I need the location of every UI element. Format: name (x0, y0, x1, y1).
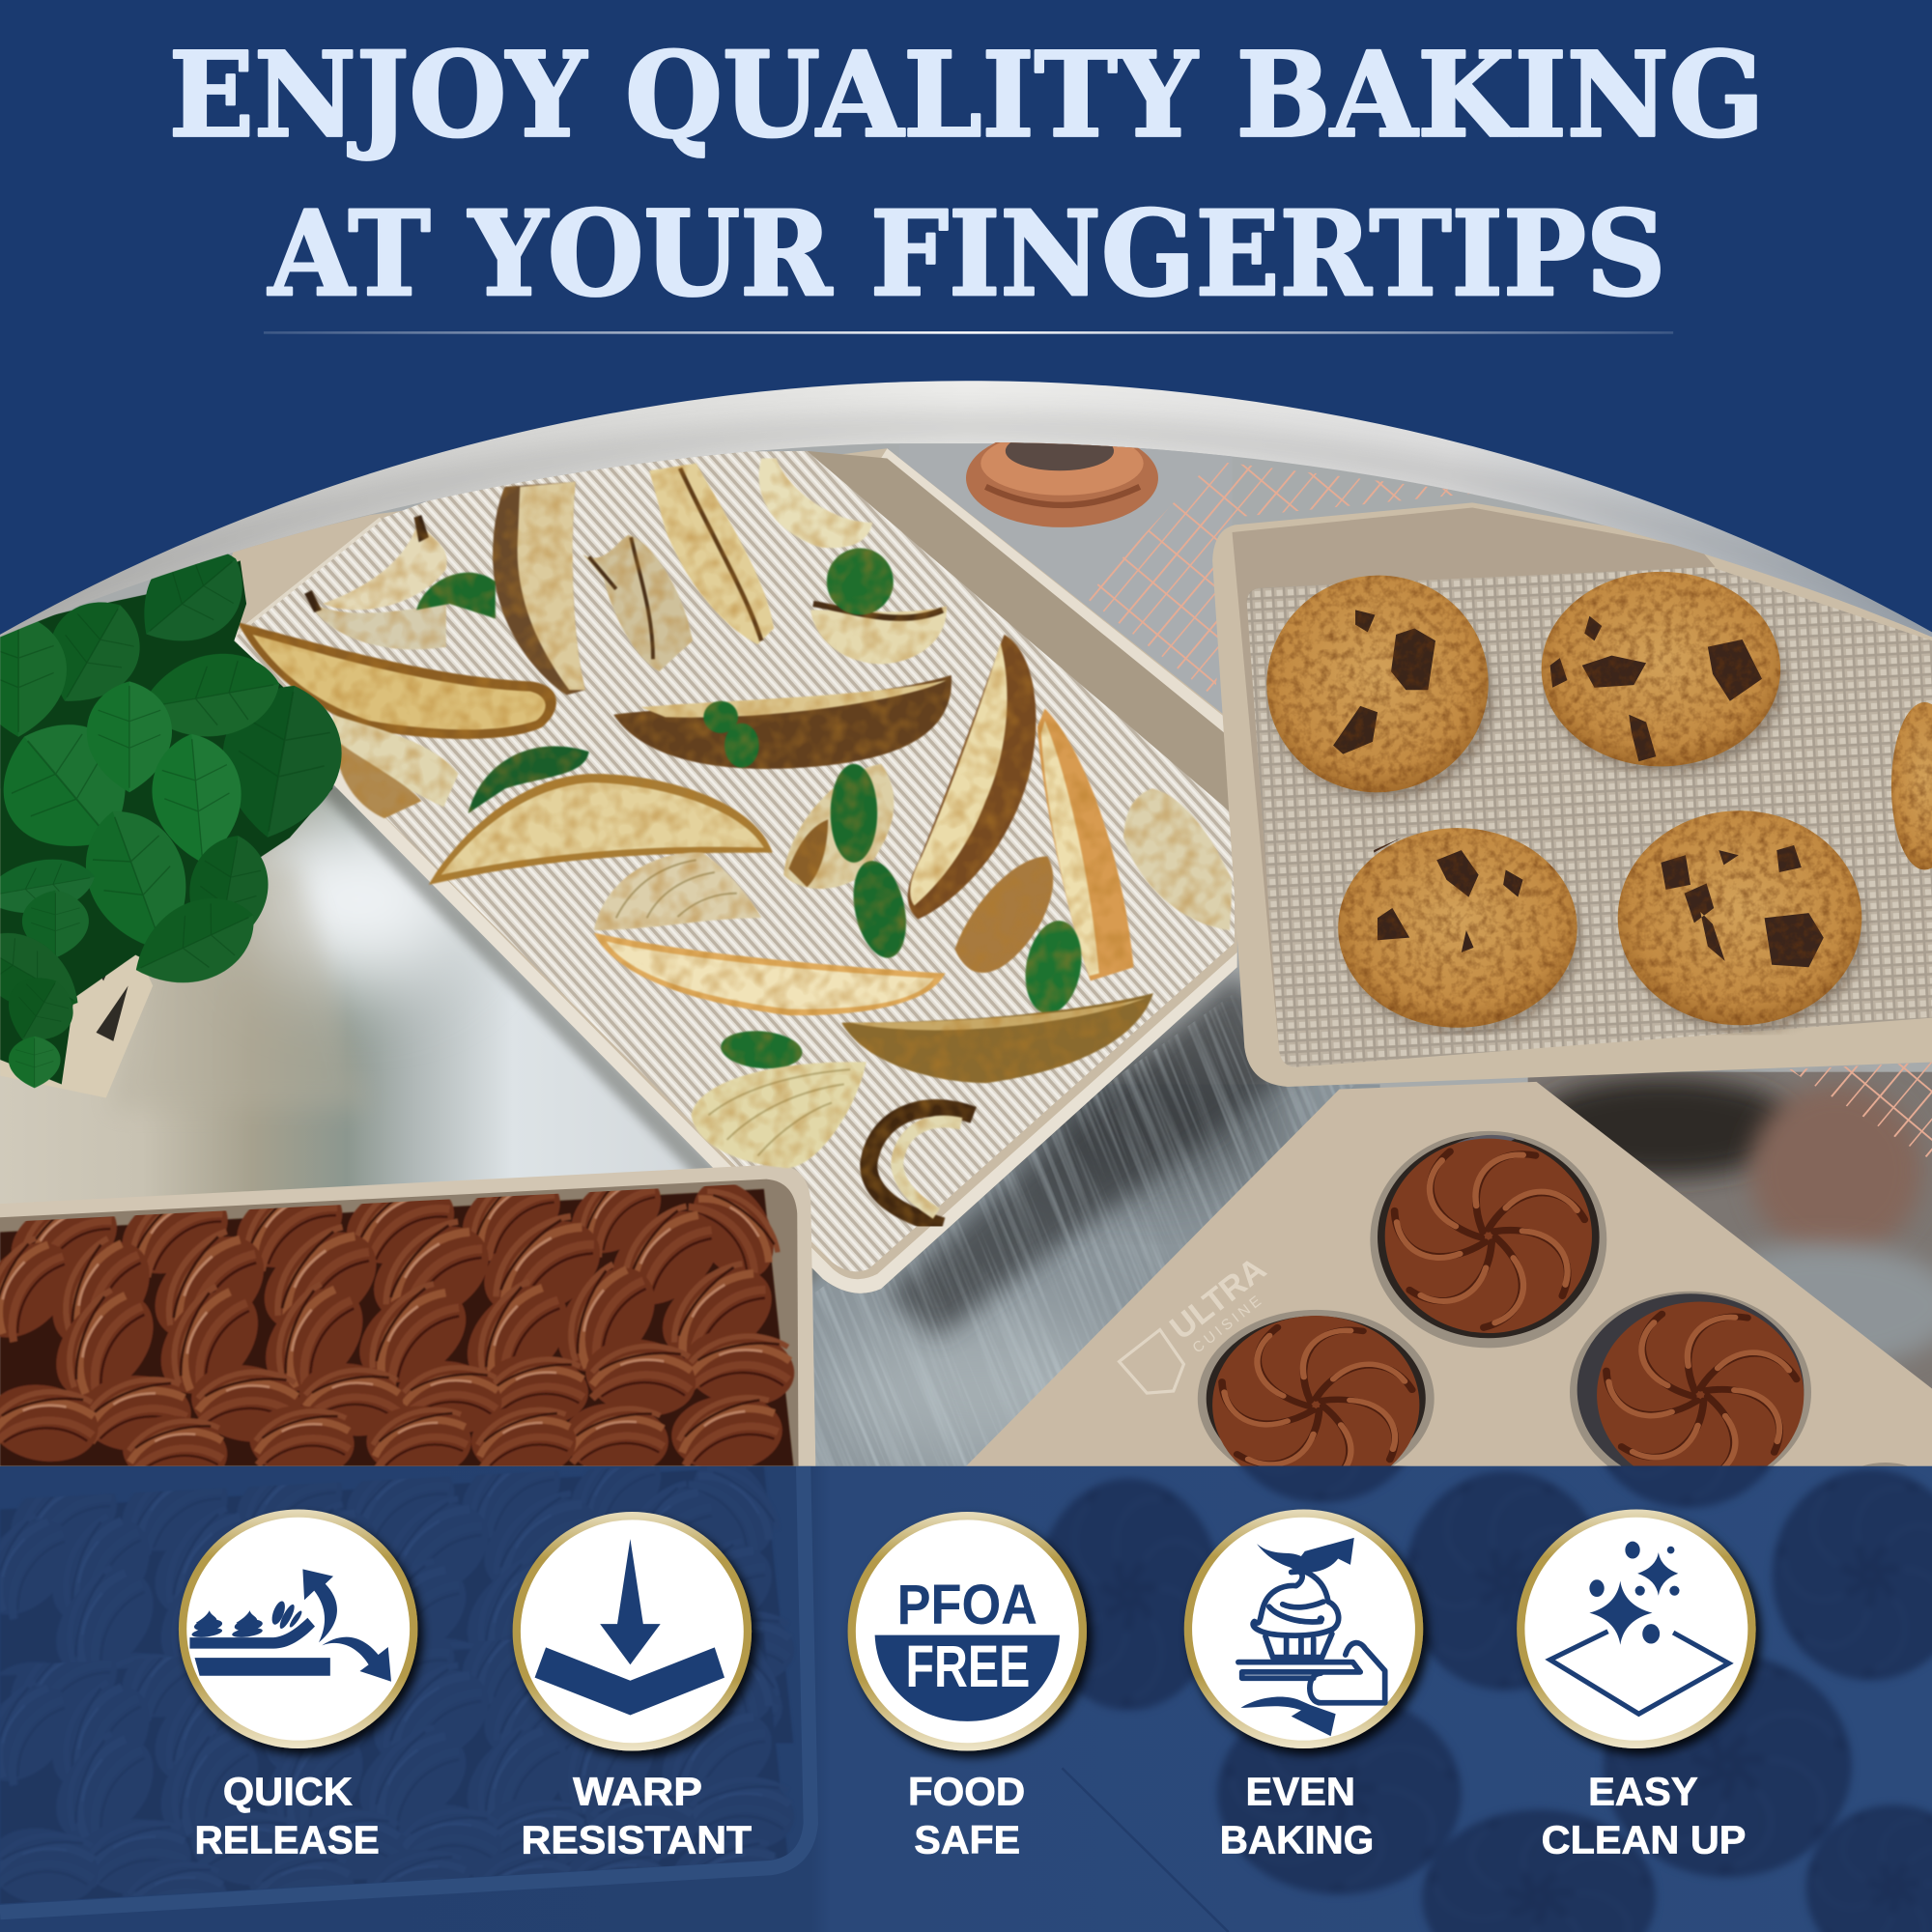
chocolate frosting (0, 1158, 801, 1492)
copper jar (966, 442, 1158, 527)
icon: even baking (1238, 1538, 1385, 1736)
icon: easy clean up (1550, 1542, 1729, 1714)
basil leaf (469, 746, 589, 813)
cup top (1370, 1131, 1606, 1348)
brownie tray (0, 1158, 815, 1492)
icon: PFOA free: PFOA (897, 1574, 1037, 1636)
feature labels (195, 1770, 1746, 1861)
potato wedge left (238, 622, 556, 739)
onion top-left (304, 515, 447, 649)
potato wedge tall right (908, 635, 1036, 920)
onion far right (1123, 788, 1233, 930)
potato wedge tall (493, 482, 585, 695)
bottom panel (0, 1301, 1932, 1932)
onion left (332, 715, 458, 818)
badge: easy clean up (1517, 1509, 1756, 1748)
onion top (759, 458, 872, 548)
copper cooling rack (1086, 461, 1479, 697)
ghost photo reflection (0, 1301, 1932, 1932)
roasted onion (955, 856, 1053, 973)
basil plant (0, 525, 353, 1097)
cookie 1 (1266, 576, 1489, 792)
basil leaf (416, 573, 496, 618)
embossed brand: ULTRA (1163, 1250, 1273, 1348)
badge: quick release (179, 1509, 417, 1748)
ghost cupcakes (1033, 1301, 1932, 1932)
photo: baking trays (0, 442, 1932, 1466)
muffin tin (966, 1082, 1932, 1466)
ghost frosting (0, 1435, 801, 1932)
cup left (1198, 1310, 1435, 1494)
title line 1: ENJOY QUALITY BAKING (169, 25, 1765, 163)
title (169, 25, 1765, 323)
basil leaf (827, 549, 894, 614)
feature labels: CLEAN UP (1542, 1817, 1746, 1861)
embossed brand: CUISINE (1190, 1291, 1267, 1356)
basil leaf (1019, 917, 1089, 1018)
icon: PFOA free: FREE (906, 1634, 1030, 1699)
cookies (1249, 557, 1932, 1035)
ghost tray rim (0, 1466, 810, 1913)
cup right (1570, 1292, 1811, 1493)
cookie 2 (1542, 572, 1780, 766)
onion right (810, 604, 947, 665)
feature labels: BAKING (1220, 1817, 1374, 1861)
label: quick release: QUICK (223, 1770, 353, 1814)
onion fan lower (692, 1062, 867, 1168)
onion with basil (783, 764, 914, 963)
onion centre (582, 535, 693, 671)
title line 2: AT YOUR FINGERTIPS (268, 185, 1665, 323)
grey arc frame (0, 381, 1932, 638)
potato wedge centre (613, 675, 952, 769)
label: food safe: FOOD (908, 1770, 1025, 1814)
badge: warp resistant (513, 1512, 752, 1750)
label: easy clean up: EASY (1588, 1770, 1698, 1814)
tray textured surface (216, 451, 1235, 1271)
steel counter (0, 443, 1932, 1466)
feature labels: RESISTANT (522, 1817, 752, 1861)
basil leaf (720, 1028, 804, 1071)
label: warp resistant: WARP (573, 1770, 702, 1814)
basil leaves (703, 701, 759, 768)
embossed brand (1115, 1250, 1290, 1406)
tray rim (203, 448, 1239, 1293)
copper rack lower right (1789, 1062, 1932, 1161)
potato wedge orange (1037, 708, 1133, 980)
cookie 5 (cropped) (1891, 702, 1932, 870)
cup far right rim (1824, 1463, 1932, 1556)
icon: PFOA free (875, 1574, 1060, 1721)
onion ring burnt (868, 1108, 974, 1226)
potato wedge pale (594, 933, 945, 1015)
badge: food safe (848, 1512, 1087, 1750)
cookie tray (1212, 502, 1932, 1087)
veg tray (203, 448, 1239, 1293)
roasted vegetables (238, 458, 1233, 1226)
potato wedge lower (841, 993, 1153, 1083)
badge: even baking (1184, 1509, 1423, 1748)
feature labels: RELEASE (195, 1817, 380, 1861)
feature labels: SAFE (914, 1817, 1020, 1861)
cookie 4 (1618, 810, 1861, 1025)
label: even baking: EVEN (1246, 1770, 1355, 1814)
paper wrapped pot (0, 943, 153, 1097)
cookie shadows (1271, 586, 1865, 1035)
icon: quick release (189, 1569, 391, 1682)
potato wedge upper (649, 464, 774, 644)
cookie 3 (1338, 828, 1577, 1028)
onion fan (594, 853, 761, 930)
potato wedge long (429, 774, 773, 885)
icon: warp resistant (535, 1539, 724, 1716)
